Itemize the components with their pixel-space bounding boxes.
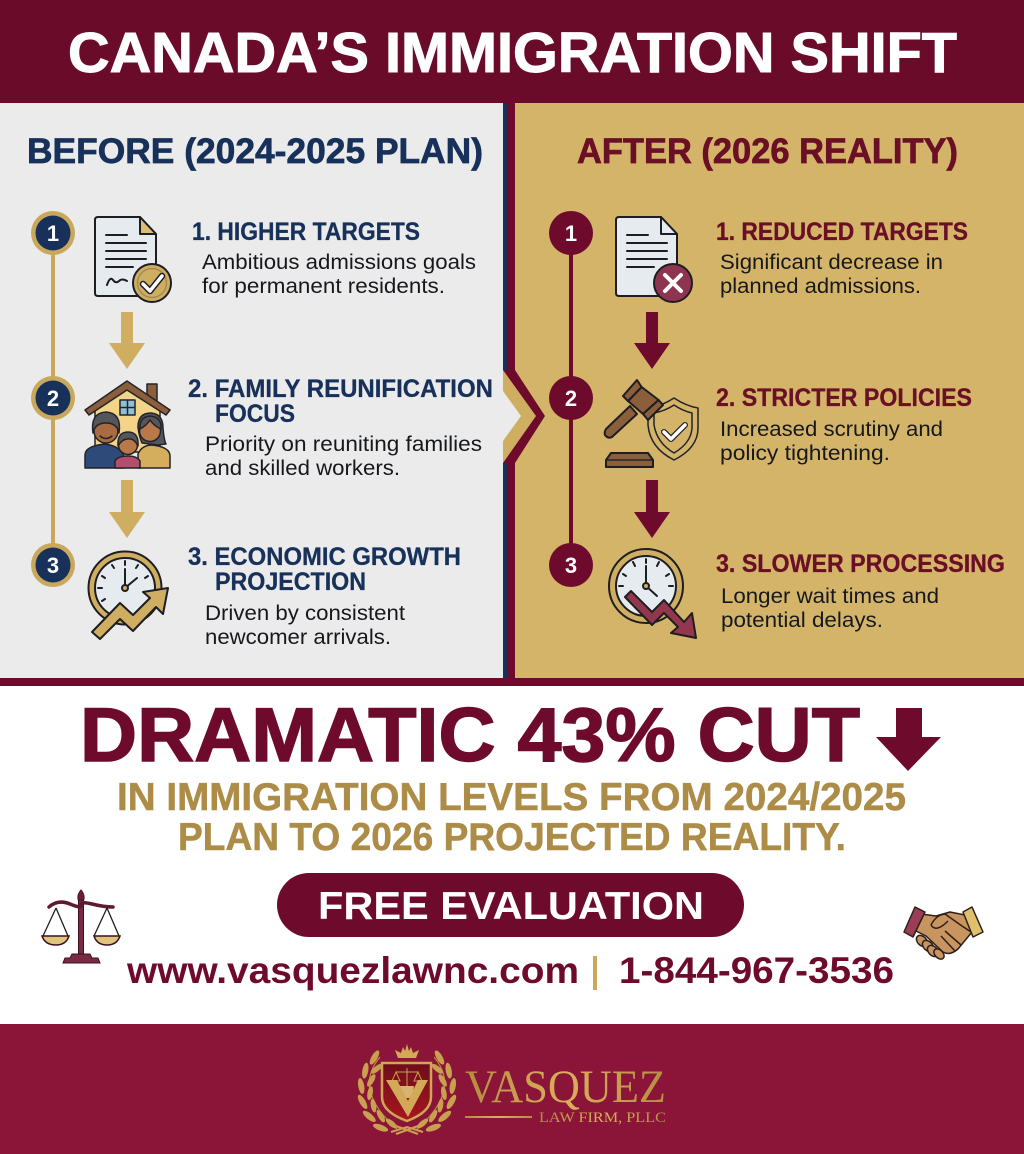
timeline: before xyxy=(31,211,75,587)
text: family reunification focus xyxy=(188,375,493,480)
heading: before: BEFORE (2024-2025 PLAN) xyxy=(27,132,483,171)
text: higher targets: 1. HIGHER TARGETS xyxy=(192,218,420,246)
timeline: after: 2 xyxy=(565,386,577,411)
text: family reunification focus: and skilled workers. xyxy=(205,457,400,480)
text: stricter policies xyxy=(716,384,972,465)
text: stricter policies: Increased scrutiny and xyxy=(720,418,943,441)
shield column xyxy=(400,1086,414,1098)
logo: crest xyxy=(356,1044,458,1134)
text: stricter policies: 2. STRICTER POLICIES xyxy=(716,384,972,412)
text: reduced targets xyxy=(716,218,968,298)
text: slower processing: 3. SLOWER PROCESSING xyxy=(716,550,1005,578)
title: CANADA’S IMMIGRATION SHIFT xyxy=(68,21,957,85)
callout subtext: PLAN TO 2026 PROJECTED REALITY. xyxy=(178,816,846,859)
arrow down xyxy=(634,312,670,369)
text: stricter policies: policy tightening. xyxy=(720,442,890,465)
bottom rule of panels xyxy=(0,678,1024,686)
callout: 43% cut xyxy=(80,693,941,859)
text: slower processing: Longer wait times and xyxy=(721,585,939,608)
timeline: before: 2 xyxy=(47,386,59,411)
timeline: after: 1 xyxy=(565,221,577,246)
center divider with chevron xyxy=(503,103,545,678)
crown xyxy=(395,1044,419,1058)
text: higher targets: for permanent residents. xyxy=(202,275,445,298)
icon: handshake xyxy=(904,907,983,961)
timeline: before: 3 xyxy=(47,553,59,578)
text: economic growth projection: 3. ECONOMIC GROWTH xyxy=(188,543,461,571)
icon: signed document with check xyxy=(95,217,171,302)
icon: scales of justice xyxy=(42,890,120,963)
text: reduced targets: planned admissions. xyxy=(720,275,921,298)
text: economic growth projection: Driven by consistent xyxy=(205,602,405,625)
panel: after xyxy=(515,103,1024,678)
text: economic growth projection xyxy=(188,543,461,649)
arrow down xyxy=(634,480,670,538)
footer band xyxy=(0,1024,1024,1154)
timeline: after xyxy=(549,211,593,587)
contact line: 1-844-967-3536 xyxy=(619,950,894,991)
shield xyxy=(382,1063,431,1121)
text: slower processing xyxy=(716,550,1005,632)
contact line xyxy=(126,950,894,991)
text: family reunification focus: FOCUS xyxy=(215,400,295,428)
arrow down xyxy=(109,480,145,538)
arrow down xyxy=(109,312,145,369)
laurel left xyxy=(356,1049,398,1133)
text: slower processing: potential delays. xyxy=(721,609,883,632)
icon: gavel and shield xyxy=(605,380,698,467)
timeline: before: 1 xyxy=(47,221,59,246)
icon: rejected document xyxy=(616,217,692,302)
logo: wordmark: LAW FIRM, PLLC xyxy=(539,1110,666,1126)
callout subtext: IN IMMIGRATION LEVELS FROM 2024/2025 xyxy=(117,776,906,819)
laurel right xyxy=(416,1049,458,1133)
button: free evaluation: FREE EVALUATION xyxy=(318,885,704,928)
text: economic growth projection: PROJECTION xyxy=(215,568,366,596)
shield monogram xyxy=(386,1080,428,1117)
icon: clock with falling arrow xyxy=(609,549,696,638)
callout: 43% cut: DRAMATIC 43% CUT xyxy=(80,693,860,778)
panel: before xyxy=(0,103,503,678)
shield scales xyxy=(392,1068,422,1092)
logo: wordmark: VASQUEZ xyxy=(465,1061,666,1113)
text: family reunification focus: 2. FAMILY REUNIFICATION xyxy=(188,375,493,403)
text: higher targets xyxy=(192,218,476,298)
text: reduced targets: 1. REDUCED TARGETS xyxy=(716,218,968,246)
text: economic growth projection: newcomer arrivals. xyxy=(205,626,391,649)
text: family reunification focus: Priority on reuniting families xyxy=(205,433,482,456)
ribbon xyxy=(391,1126,423,1134)
text: higher targets: Ambitious admissions goals xyxy=(202,251,476,274)
text: reduced targets: Significant decrease in xyxy=(720,251,943,274)
timeline: after: 3 xyxy=(565,553,577,578)
icon: family and house xyxy=(85,381,170,468)
icon: clock with rising arrow xyxy=(88,552,168,639)
contact line: www.vasquezlawnc.com xyxy=(126,950,579,991)
button: free evaluation xyxy=(277,873,744,937)
callout subtext xyxy=(117,776,906,859)
heading: after: AFTER (2026 REALITY) xyxy=(577,132,958,171)
header banner xyxy=(0,0,1024,103)
icon: big down arrow xyxy=(876,708,941,771)
